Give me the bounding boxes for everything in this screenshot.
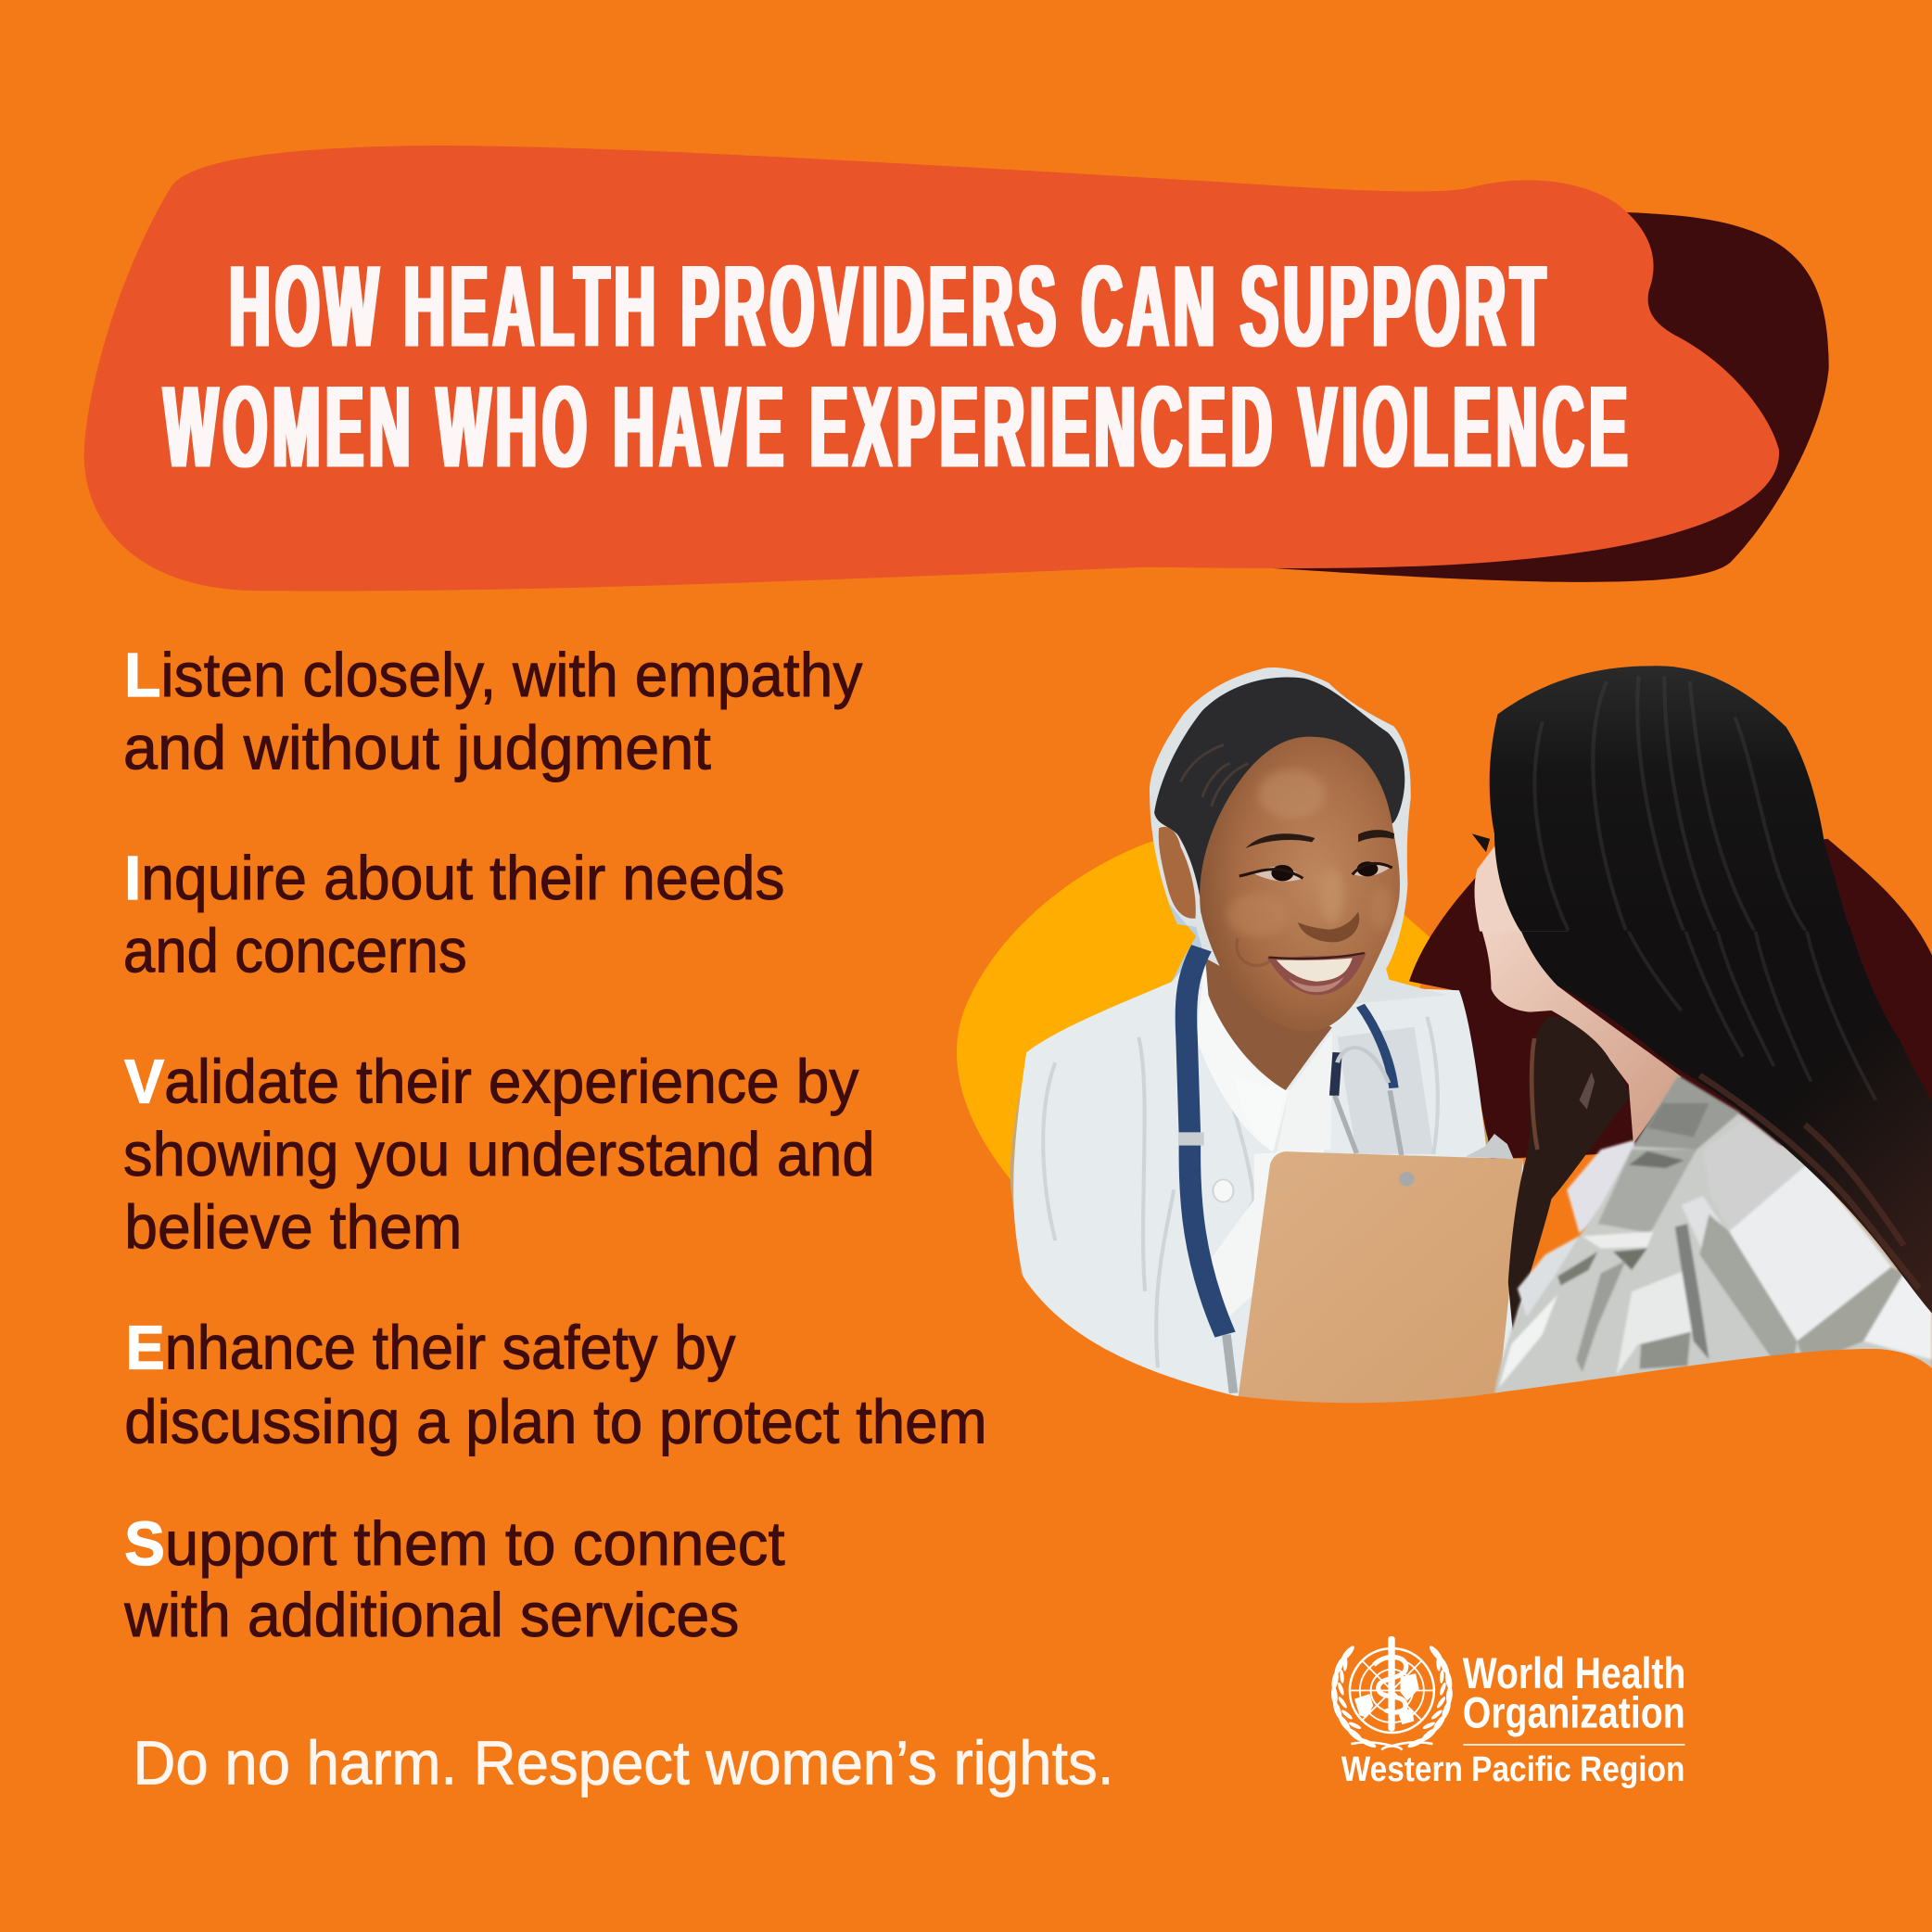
- plaid jacket: [1493, 1075, 1932, 1409]
- doctor body: [1010, 946, 1523, 1398]
- coat shading: [1043, 986, 1438, 1367]
- item: inquire: [123, 845, 785, 986]
- item: support: [123, 1510, 785, 1650]
- eyelash: [1472, 833, 1490, 852]
- shirt and collar: [1196, 963, 1290, 1151]
- WHO wordmark: World Health: [1463, 1649, 1685, 1698]
- title: WOMEN WHO HAVE EXPERIENCED VIOLENCE: [164, 361, 1627, 491]
- laurel right: [1406, 1645, 1454, 1749]
- LIVES text list: [123, 642, 987, 1650]
- item: enhance: Enhance their safety by: [126, 1315, 736, 1383]
- halo cut-out edge: [1150, 667, 1446, 1004]
- WHO logo: [1330, 1636, 1685, 1788]
- item: listen: and without judgment: [123, 714, 711, 782]
- inner top: [1567, 1140, 1638, 1233]
- backdrop blobs and doctor body: [957, 833, 1932, 1398]
- face: [1200, 737, 1400, 1032]
- item: validate: showing you understand and: [123, 1121, 875, 1189]
- laurel left: [1330, 1645, 1378, 1749]
- item: validate: Validate their experience by: [124, 1049, 859, 1117]
- face upper: [1474, 833, 1569, 932]
- item: inquire: Inquire about their needs: [124, 845, 785, 913]
- item: listen: [123, 642, 863, 782]
- neck and chin: [1481, 925, 1681, 1143]
- coat button: [1213, 1179, 1234, 1201]
- neck: [1205, 958, 1332, 1090]
- item: listen: Listen closely, with empathy: [124, 642, 863, 710]
- stethoscope and clipboard: [1178, 948, 1523, 1404]
- item: inquire: and concerns: [123, 918, 467, 986]
- title: [164, 240, 1627, 491]
- closing line: Do no harm. Respect women’s rights.: [133, 1730, 1113, 1799]
- title: HOW HEALTH PROVIDERS CAN SUPPORT: [229, 240, 1545, 371]
- ribbon: [1351, 1742, 1432, 1750]
- ear: [1159, 827, 1196, 919]
- nose: [1298, 911, 1359, 942]
- staff and serpent: [1388, 1636, 1395, 1732]
- mouth: [1267, 952, 1366, 995]
- yellow blob: [957, 833, 1433, 1179]
- hair strands: [1534, 676, 1805, 931]
- lower strands: [1626, 925, 1875, 1100]
- item: validate: [123, 1049, 875, 1262]
- long hair: [1490, 666, 1850, 932]
- lower hair lock: [1508, 1017, 1630, 1332]
- hair wisps: [1180, 744, 1249, 807]
- orange wave mask: [991, 1261, 1932, 1444]
- continents: [1354, 1694, 1373, 1718]
- globe: [1350, 1648, 1434, 1733]
- WHO logo: Organization: [1463, 1689, 1685, 1738]
- region name: Western Pacific Region: [1341, 1749, 1684, 1788]
- patient lower body: [1481, 925, 1932, 1409]
- item: support: with additional services: [123, 1582, 739, 1650]
- white coat: [1013, 946, 1523, 1398]
- eyebrows: [1245, 833, 1315, 848]
- eyes: [1254, 867, 1303, 882]
- dark blob: [1409, 839, 1932, 1159]
- hair: [1154, 677, 1405, 896]
- banner blobs: [84, 146, 1829, 591]
- item: validate: believe them: [124, 1193, 462, 1262]
- illustration: doctor and patient: [957, 666, 1932, 1444]
- stethoscope: [1178, 948, 1402, 1393]
- clipboard: [1238, 1134, 1523, 1404]
- item: enhance: discussing a plan to protect them: [124, 1388, 987, 1456]
- lower long hair: [1519, 925, 1932, 1314]
- patient upper head: [1472, 666, 1850, 932]
- brown hair edge: [1699, 1075, 1919, 1289]
- WHO emblem: [1330, 1636, 1454, 1750]
- title banner: [84, 146, 1829, 591]
- item: support: Support them to connect: [124, 1510, 785, 1579]
- doctor head: [1150, 667, 1446, 1090]
- smile line: [1237, 938, 1270, 965]
- face highlights: [1258, 769, 1326, 819]
- item: enhance: [124, 1315, 987, 1456]
